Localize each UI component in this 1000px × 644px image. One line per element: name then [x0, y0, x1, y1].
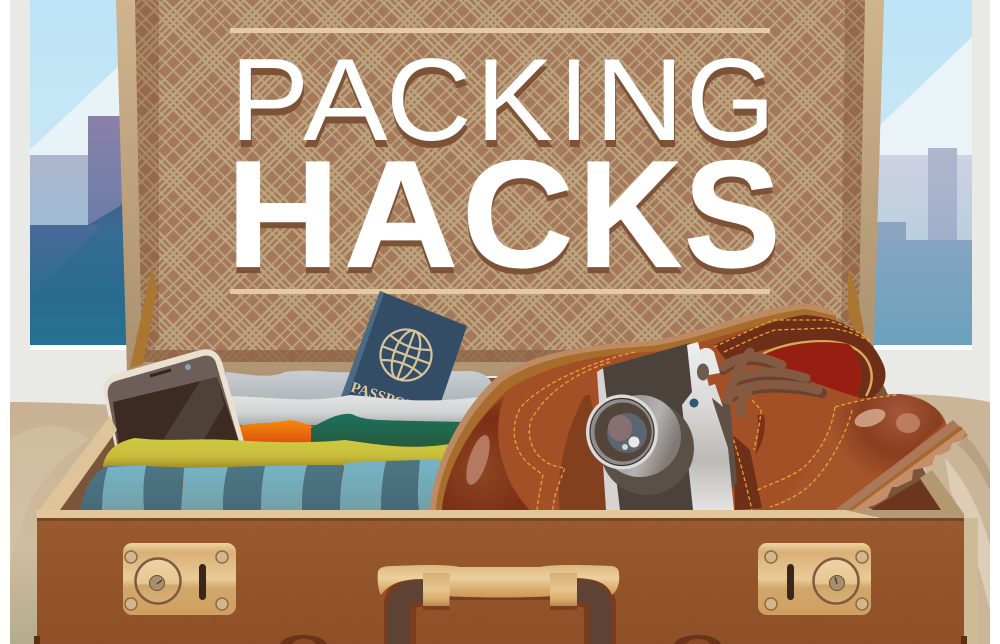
title: PACKING: K	[476, 34, 553, 165]
camera	[586, 342, 737, 510]
title: HACKS shadow: K	[578, 136, 682, 306]
title: PACKING shadow: G	[687, 41, 776, 172]
suitcase body	[37, 518, 964, 644]
title: PACKING shadow: A	[304, 41, 389, 172]
clothing: green	[311, 414, 462, 448]
handle brass bar	[378, 565, 619, 598]
handle strap sides	[399, 591, 600, 644]
title: HACKS shadow: H	[226, 136, 340, 306]
passport	[338, 291, 467, 419]
phone bezel	[108, 356, 240, 470]
shoe	[430, 304, 968, 510]
camera lens barrel	[600, 401, 694, 495]
title: PACKING: C	[386, 34, 472, 165]
table surface left	[10, 402, 115, 644]
title: PACKING shadow: N	[596, 41, 685, 172]
phone screen gloss	[160, 377, 224, 445]
title: PACKING	[230, 34, 775, 165]
lid left side panel	[135, 0, 159, 362]
camera side panel	[712, 400, 737, 500]
table surface right	[880, 394, 990, 644]
title: HACKS shadow: C	[462, 136, 574, 306]
suitcase front rim	[37, 510, 964, 518]
phone case	[103, 349, 245, 470]
shoe outsole	[835, 420, 968, 510]
title top rule	[230, 28, 770, 33]
title: PACKING shadow	[231, 41, 776, 172]
phone speaker	[150, 370, 171, 376]
shoe laces	[723, 352, 822, 414]
shoe heel shine	[442, 395, 530, 510]
right lock	[758, 543, 871, 615]
camera left strip	[597, 368, 620, 510]
title: PACKING: I	[559, 34, 588, 165]
suitcase handle	[378, 565, 619, 644]
title	[226, 28, 780, 306]
title: PACKING: P	[230, 34, 309, 165]
handle strap shadows	[400, 591, 600, 644]
handle clip right	[550, 573, 577, 610]
passport globe icon	[373, 322, 439, 388]
lid lining pattern	[135, 0, 865, 362]
lid bottom band	[142, 350, 858, 362]
lid strap left	[130, 267, 157, 368]
handle clip left	[423, 573, 450, 610]
shoe toe cap	[770, 394, 944, 510]
suitcase left rim	[37, 416, 117, 518]
lid right side panel	[841, 0, 865, 362]
handle shadow under bar	[449, 597, 550, 600]
phone camera dot	[185, 364, 191, 370]
camera lens glass	[586, 394, 658, 470]
bottom feet	[34, 635, 967, 644]
clothing: orange	[238, 420, 320, 445]
title: PACKING shadow: P	[231, 41, 310, 172]
camera body	[601, 343, 726, 510]
clothing: striped blue towel	[80, 460, 440, 510]
title: HACKS: S	[684, 130, 780, 300]
title: PACKING: G	[686, 34, 775, 165]
suitcase right rim	[918, 470, 964, 518]
title: PACKING shadow: I	[560, 41, 590, 172]
title: HACKS shadow: A	[344, 136, 458, 306]
lid strap right	[848, 268, 864, 345]
title: HACKS	[226, 130, 780, 300]
window right: skyline	[870, 0, 972, 350]
title: PACKING shadow: C	[387, 41, 473, 172]
suitcase interior	[60, 378, 943, 510]
title: HACKS shadow: S	[684, 136, 780, 306]
title: HACKS: A	[344, 130, 458, 300]
title bottom rule	[230, 289, 770, 294]
shoe stitching	[514, 320, 899, 510]
title: PACKING shadow: K	[477, 41, 554, 172]
lid frame	[116, 0, 884, 372]
clothing: grey layer	[226, 371, 494, 412]
shoe red lining	[765, 342, 861, 397]
title: HACKS: H	[226, 130, 340, 300]
title: PACKING: A	[303, 34, 388, 165]
title: HACKS: K	[578, 130, 682, 300]
clothing: yellow towel	[103, 438, 450, 469]
phone	[103, 349, 245, 470]
passport label: PASSPORT	[349, 380, 427, 419]
phone screen	[113, 377, 240, 470]
shoe collar	[714, 315, 885, 398]
suitcase inner right wall	[870, 480, 941, 510]
title: HACKS: C	[462, 130, 574, 300]
window left: skyline	[30, 0, 130, 350]
shoe welt	[430, 304, 836, 510]
left lock	[123, 543, 236, 615]
camera right plate	[682, 342, 734, 510]
shoe upper	[442, 315, 947, 510]
camera winder dials	[697, 348, 723, 407]
title: HACKS shadow	[226, 136, 780, 306]
shoe quarter shadow	[559, 395, 614, 510]
clothing: white layer	[228, 395, 487, 425]
title: PACKING: N	[595, 34, 684, 165]
suitcase lid	[116, 0, 884, 376]
